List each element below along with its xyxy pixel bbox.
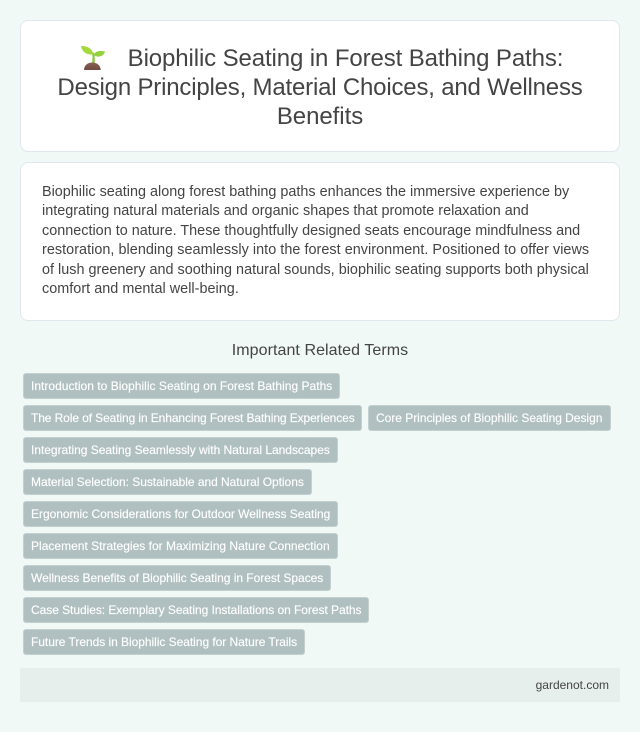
footer bar (20, 668, 620, 702)
tag: Case Studies: Exemplary Seating Installations on Forest Paths (31, 603, 361, 617)
heading: important related terms: Important Related Terms (232, 342, 408, 359)
tag: Introduction to Biophilic Seating on Forest Bathing Paths (31, 379, 332, 393)
title (57, 45, 583, 130)
text block: introduction: comfort and mental well-being. (42, 281, 239, 297)
tag: Material Selection: Sustainable and Natural Options (31, 475, 304, 489)
title: Design Principles, Material Choices, and Wellness (57, 74, 583, 101)
tag (368, 405, 611, 431)
tag: Integrating Seating Seamlessly with Natural Landscapes (31, 443, 330, 457)
tag: Future Trends in Biophilic Seating for Nature Trails (31, 635, 297, 649)
tag (23, 629, 305, 655)
tag (23, 533, 338, 559)
panel: introduction paragraph (20, 162, 620, 321)
text block: introduction: Biophilic seating along forest bathing paths enhances the immersive experience by (42, 184, 569, 200)
tag (23, 437, 338, 463)
title: Biophilic Seating in Forest Bathing Paths: (128, 45, 563, 72)
icon: seedling (81, 46, 106, 70)
tag (23, 405, 362, 431)
tag list (23, 373, 611, 655)
tag (23, 469, 312, 495)
tag: Wellness Benefits of Biophilic Seating in Forest Spaces (31, 571, 323, 585)
tag: Ergonomic Considerations for Outdoor Wellness Seating (31, 507, 330, 521)
text block: introduction: of lush greenery and soothing natural sounds, biophilic seating supports both physical (42, 262, 589, 278)
tag: The Role of Seating in Enhancing Forest Bathing Experiences (31, 411, 355, 425)
text block: introduction: connection to nature. These thoughtfully designed seats encourage mindfulness and (42, 223, 580, 239)
tag (23, 501, 338, 527)
tag: Placement Strategies for Maximizing Nature Connection (31, 539, 330, 553)
tag: Core Principles of Biophilic Seating Design (376, 411, 602, 425)
footer text: site name: gardenot.com (536, 678, 609, 692)
tag (23, 373, 340, 399)
tag (23, 565, 331, 591)
panel: title card (20, 20, 620, 152)
tag (23, 597, 369, 623)
text block: introduction: integrating natural materials and organic shapes that promote relaxation and (42, 203, 529, 219)
text block: introduction: restoration, blending seamlessly into the forest environment. Positioned to offer views (42, 242, 589, 258)
title: Benefits (277, 103, 363, 130)
text block: introduction (42, 184, 589, 297)
